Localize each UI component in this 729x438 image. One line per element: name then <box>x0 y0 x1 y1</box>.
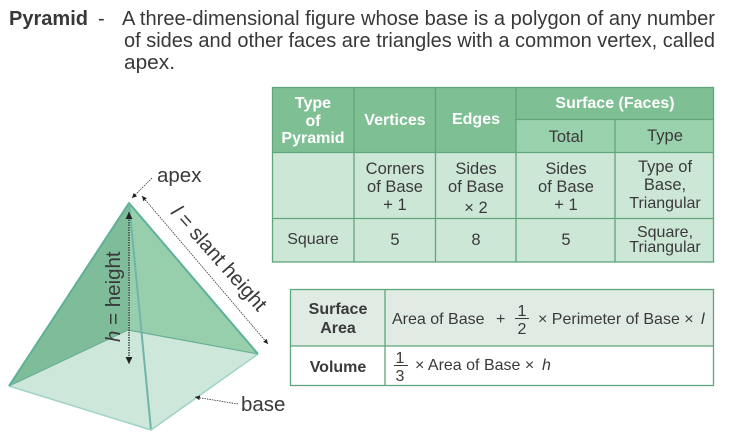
square row: Triangular <box>629 239 701 256</box>
pyramid base <box>9 330 258 430</box>
square row <box>287 224 701 256</box>
volume formula: 3 <box>396 368 405 385</box>
rule row: + 1 <box>554 196 578 214</box>
surface area formula: + <box>496 311 505 328</box>
rule row: Corners <box>366 160 424 178</box>
height arrow <box>128 212 130 364</box>
formula table <box>290 289 714 386</box>
rule row: Sides <box>545 160 587 178</box>
pyramid edges <box>9 203 258 430</box>
row labels: Area <box>320 320 356 337</box>
row labels <box>309 301 367 376</box>
pyramid diagram <box>9 164 285 430</box>
surface area row background <box>290 289 714 346</box>
rule row: × 2 <box>464 199 488 217</box>
slant height arrow <box>142 196 268 344</box>
definition text: apex. <box>124 52 175 74</box>
rule row: of Base <box>367 178 423 196</box>
rule row: Sides <box>455 160 497 178</box>
label: base: base <box>241 393 285 416</box>
square row: 5 <box>561 231 571 249</box>
header text: Pyramid <box>281 130 345 147</box>
definition text: Pyramid <box>9 8 88 30</box>
header text: Type <box>647 127 683 145</box>
label: height: h = height <box>102 251 125 342</box>
base arrow <box>195 397 238 404</box>
table header backgrounds <box>272 87 714 152</box>
row labels: Volume <box>310 359 366 376</box>
header text: of <box>305 113 321 130</box>
volume formula <box>394 350 551 385</box>
square row: Square <box>287 231 339 248</box>
surface area formula: 1 <box>518 303 527 320</box>
header text: Total <box>549 128 583 146</box>
square row: Square, <box>637 224 693 241</box>
back right face <box>128 203 258 354</box>
definition text: - <box>98 8 105 30</box>
volume row background <box>290 346 714 386</box>
definition text: of sides and other faces are triangles with a common vertex, called <box>124 30 715 52</box>
label: apex: apex <box>157 164 202 187</box>
square row: 5 <box>390 231 400 249</box>
header text: Type <box>295 95 331 112</box>
header text: Vertices <box>364 112 426 129</box>
volume formula: 1 <box>396 350 405 367</box>
square row: 8 <box>471 231 481 249</box>
back left face <box>9 203 129 386</box>
row labels: Surface <box>309 301 367 318</box>
rule row: Type of <box>638 158 692 176</box>
header text: Edges <box>452 111 500 128</box>
rule row: of Base <box>448 178 504 196</box>
header text: Surface (Faces) <box>555 95 675 112</box>
volume formula: h <box>542 357 551 374</box>
table body background <box>272 152 714 262</box>
label: slant height: l = slant height <box>166 201 272 316</box>
rule row: of Base <box>538 178 594 196</box>
surface area formula: 2 <box>518 321 527 338</box>
surface area formula: Area of Base <box>392 311 485 328</box>
rule row: + 1 <box>383 196 407 214</box>
definition text: A three-dimensional figure whose base is a polygon of any number <box>122 8 715 30</box>
surface area formula: × Perimeter of Base × <box>538 311 694 328</box>
surface area formula <box>392 303 705 338</box>
rule row: Base, <box>644 176 686 194</box>
volume formula: × Area of Base × <box>415 357 534 374</box>
header text <box>281 95 683 147</box>
properties table <box>272 87 714 262</box>
apex arrow <box>132 178 152 198</box>
rule row <box>366 158 701 217</box>
surface area formula: l <box>701 311 705 328</box>
rule row: Triangular <box>629 195 701 212</box>
definition text <box>9 8 715 74</box>
